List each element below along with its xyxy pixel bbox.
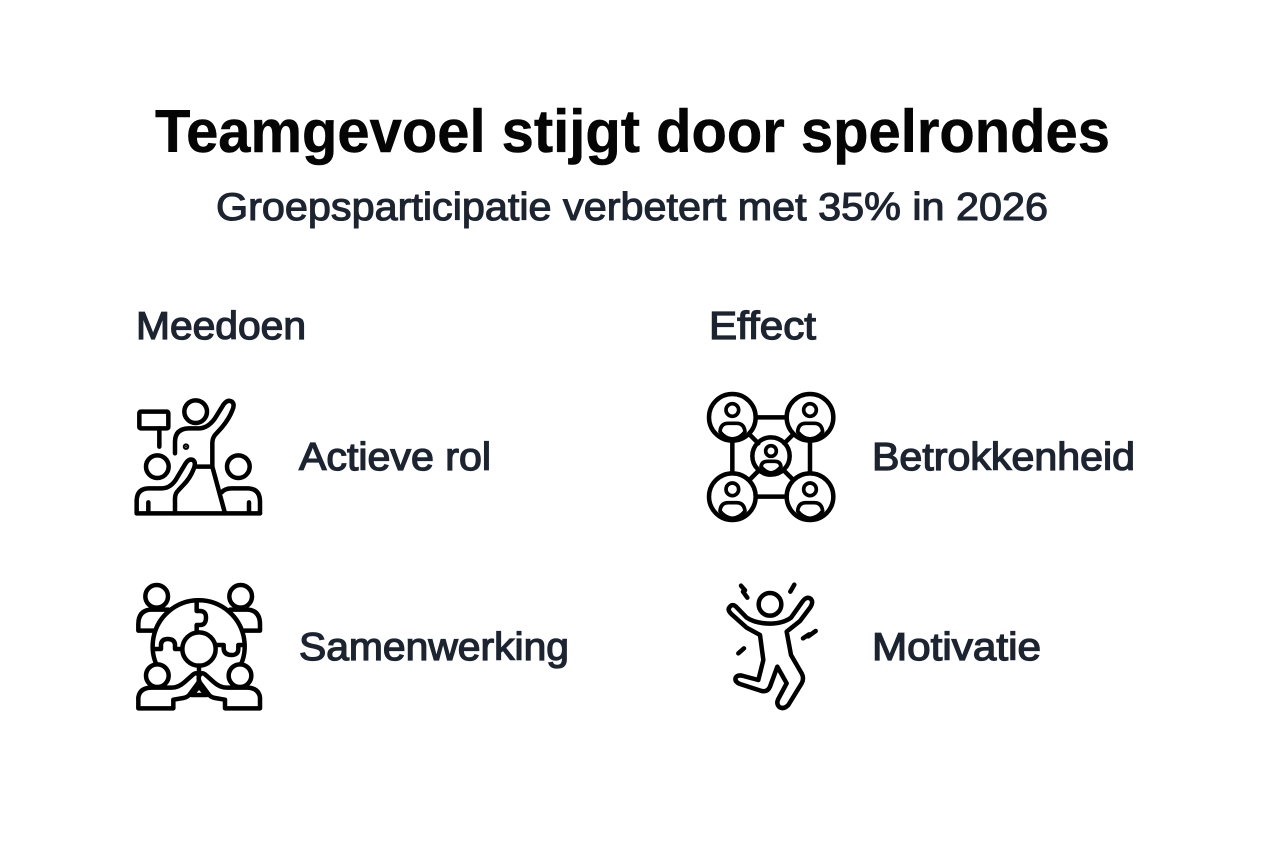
icon: jumping motivated person xyxy=(729,585,816,708)
icon: connected people network xyxy=(709,394,833,520)
label: Motivatie: Motivatie xyxy=(872,626,1041,669)
icon: people around puzzle circle xyxy=(138,585,260,708)
column heading: Effect: Effect xyxy=(709,305,816,348)
label: Actieve rol: Actieve rol xyxy=(299,436,491,479)
title: Teamgevoel stijgt door spelrondes xyxy=(155,98,1110,165)
column heading: Meedoen: Meedoen xyxy=(136,305,306,348)
label: Betrokkenheid: Betrokkenheid xyxy=(872,436,1135,479)
icon: active participant with raised arm and sign xyxy=(137,400,260,513)
label: Samenwerking: Samenwerking xyxy=(299,626,569,669)
subtitle: Groepsparticipatie verbetert met 35% in 2026 xyxy=(216,186,1048,229)
